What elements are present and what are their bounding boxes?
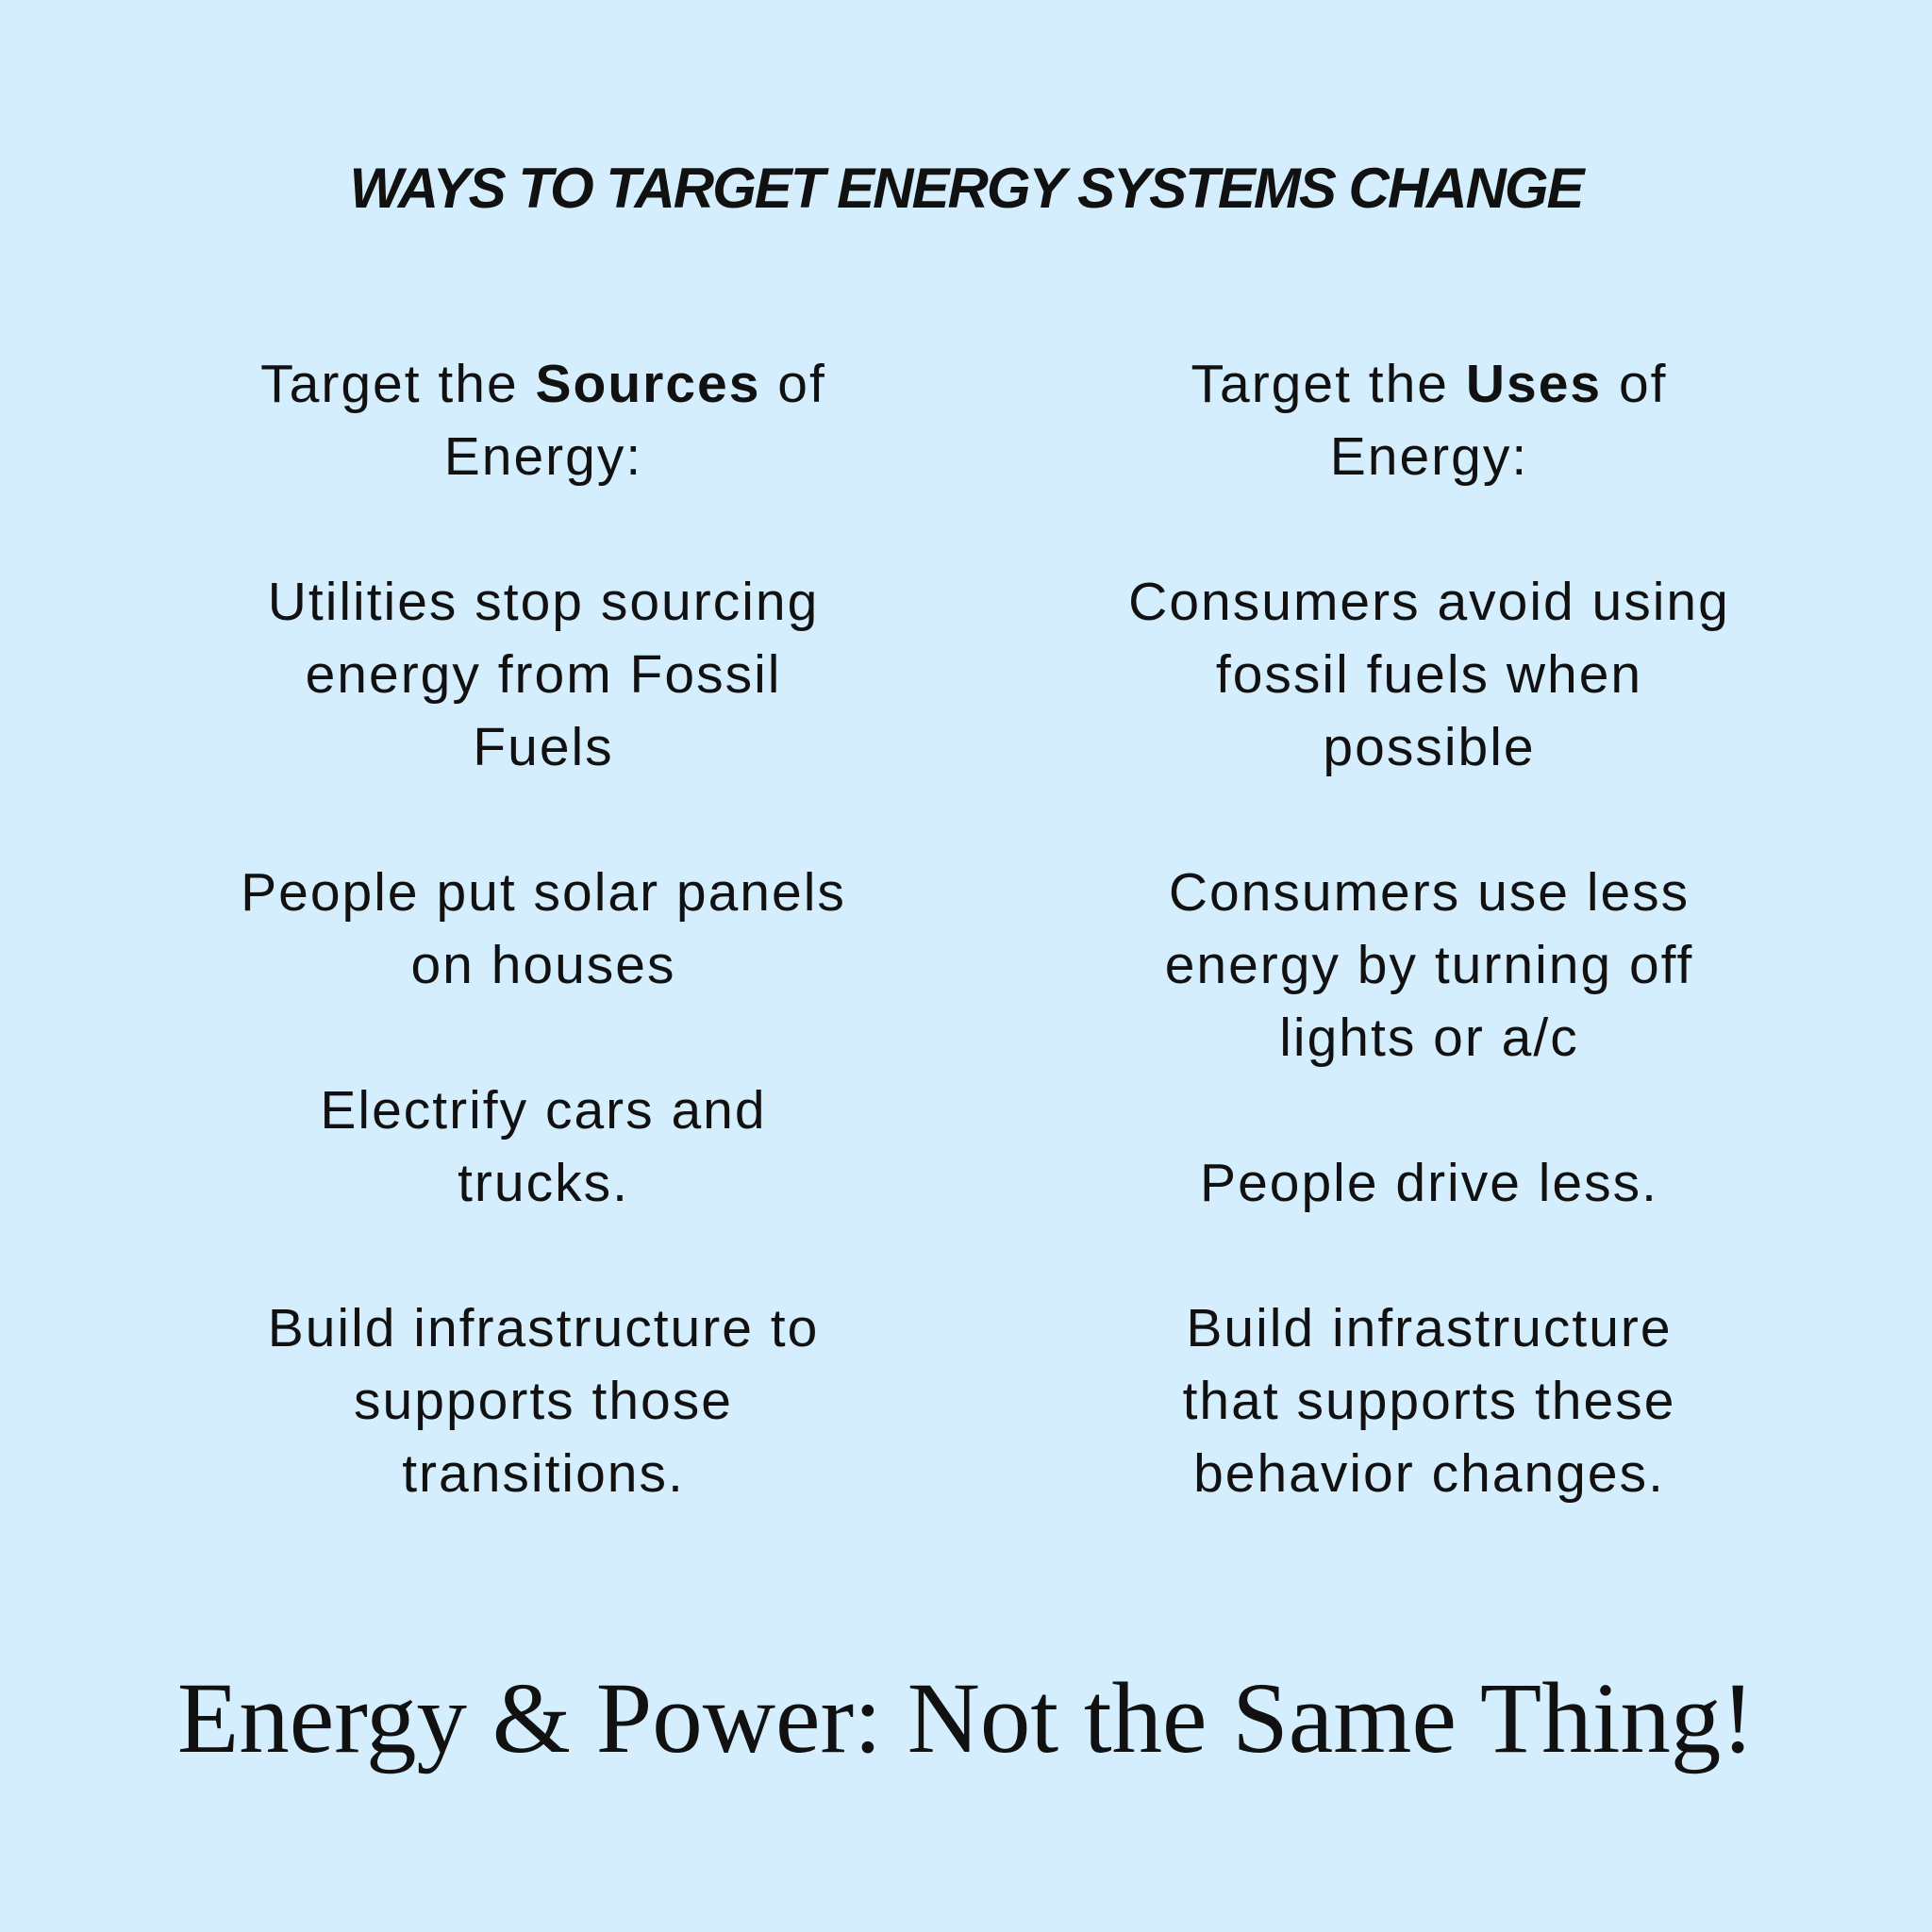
text: electrify: trucks. — [458, 1153, 629, 1213]
heading: uses: Energy: — [1330, 426, 1528, 487]
text: use less: energy by turning off — [1165, 935, 1693, 995]
heading: sources — [260, 354, 826, 487]
text: solar — [241, 862, 846, 995]
title: WAYS TO TARGET ENERGY SYSTEMS CHANGE — [349, 157, 1583, 220]
text: use less: lights or a/c — [1279, 1008, 1579, 1068]
text: utilities — [268, 572, 819, 777]
text: consumers avoid — [1128, 572, 1730, 777]
text: electrify — [320, 1080, 767, 1213]
text: infrastructure sources: Build infrastructure to — [268, 1298, 819, 1358]
text: electrify: Electrify cars and — [320, 1080, 767, 1141]
text: use less: Consumers use less — [1169, 862, 1690, 923]
text: consumers avoid: fossil fuels when — [1216, 644, 1642, 705]
footer title: Energy & Power: Not the Same Thing! — [177, 1663, 1755, 1774]
text: consumers avoid: Consumers avoid using — [1128, 572, 1730, 632]
text: infrastructure sources: transitions. — [402, 1443, 685, 1504]
text: drive less: People drive less. — [1200, 1153, 1658, 1213]
heading: sources: Energy: — [444, 426, 642, 487]
text: solar: People put solar panels — [241, 862, 846, 923]
panel: sources of energy — [241, 354, 846, 1504]
text: use less — [1165, 862, 1693, 1068]
text: infrastructure uses: behavior changes. — [1193, 1443, 1665, 1504]
text: utilities: Fuels — [473, 717, 614, 777]
text: infrastructure sources: supports those — [354, 1371, 733, 1431]
text: solar: on houses — [410, 935, 676, 995]
heading: sources: Target the Sources of — [260, 354, 826, 414]
text: utilities: energy from Fossil — [306, 644, 781, 705]
text: infrastructure uses — [1183, 1298, 1675, 1504]
text: infrastructure uses: that supports these — [1183, 1371, 1675, 1431]
heading: uses: Target the Uses of — [1191, 354, 1667, 414]
text: infrastructure sources — [268, 1298, 819, 1504]
panel: uses of energy — [1128, 354, 1730, 1504]
heading: uses — [1191, 354, 1667, 487]
text: infrastructure uses: Build infrastructure — [1186, 1298, 1673, 1358]
text: consumers avoid: possible — [1323, 717, 1536, 777]
text: utilities: Utilities stop sourcing — [268, 572, 819, 632]
